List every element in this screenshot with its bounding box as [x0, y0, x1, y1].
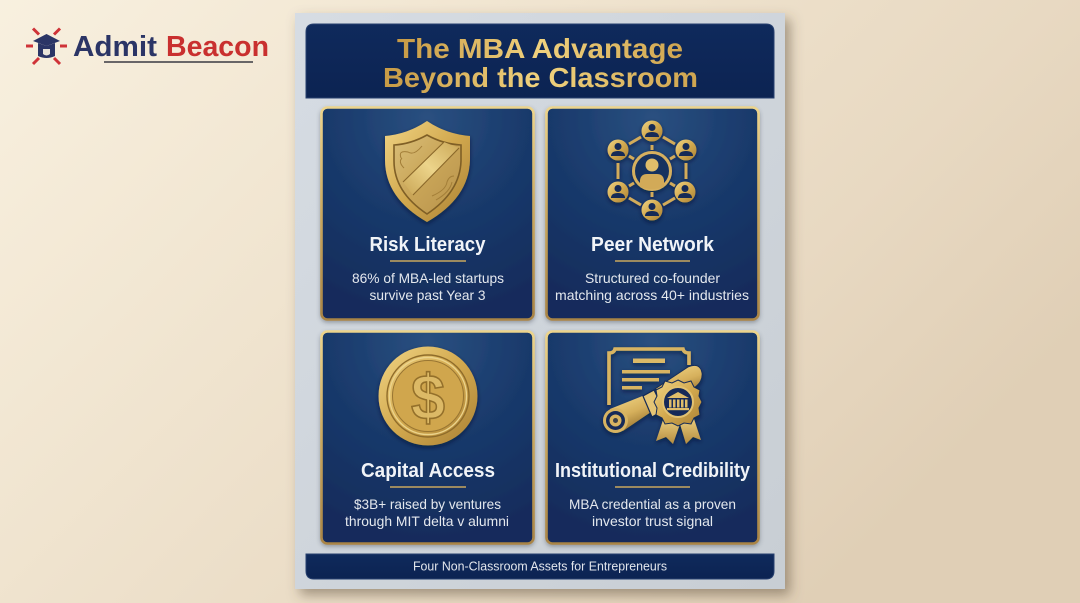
footer banner: Four Non-Classroom Assets for Entrepreneurs: [413, 560, 667, 574]
wordmark: Admit: [73, 31, 157, 63]
header banner: [306, 24, 774, 98]
stat text: Structured co-founder: [585, 270, 720, 286]
wordmark: [73, 31, 269, 63]
panel: Institutional Credibility: [546, 332, 758, 544]
footer banner: [306, 554, 774, 579]
panel: Capital Access: [322, 332, 534, 544]
icon: gold dollar coin: [378, 346, 478, 446]
icon: gold shield: [385, 121, 470, 222]
title: [383, 33, 698, 93]
stat text: through MIT delta v alumni: [345, 513, 509, 529]
poster panel: [295, 13, 785, 589]
logo: Admit Beacon: [26, 28, 269, 64]
stat text: investor trust signal: [592, 513, 713, 529]
stat text: [345, 496, 509, 529]
title: The MBA Advantage: [397, 33, 683, 64]
heading: Risk Literacy: [370, 234, 486, 256]
wordmark: Beacon: [166, 31, 269, 63]
icon: diploma scroll and seal: [603, 349, 702, 444]
heading: Peer Network: [591, 234, 715, 256]
heading: Capital Access: [361, 460, 495, 482]
stat text: 86% of MBA-led startups: [352, 270, 504, 286]
stat text: MBA credential as a proven: [569, 496, 736, 512]
title: Beyond the Classroom: [383, 62, 698, 93]
panel: Peer Network: [546, 108, 758, 320]
icon: gold dollar coin: $: [411, 361, 445, 433]
stat text: $3B+ raised by ventures: [354, 496, 501, 512]
stat text: survive past Year 3: [370, 287, 486, 303]
panel: Risk Literacy: [322, 108, 534, 320]
heading: Institutional Credibility: [555, 460, 751, 482]
stat text: [555, 270, 749, 303]
stat text: [569, 496, 736, 529]
stat text: [352, 270, 504, 303]
icon: peer network: [608, 120, 696, 220]
stat text: matching across 40+ industries: [555, 287, 749, 303]
icon: beacon graduation cap: [26, 28, 67, 64]
